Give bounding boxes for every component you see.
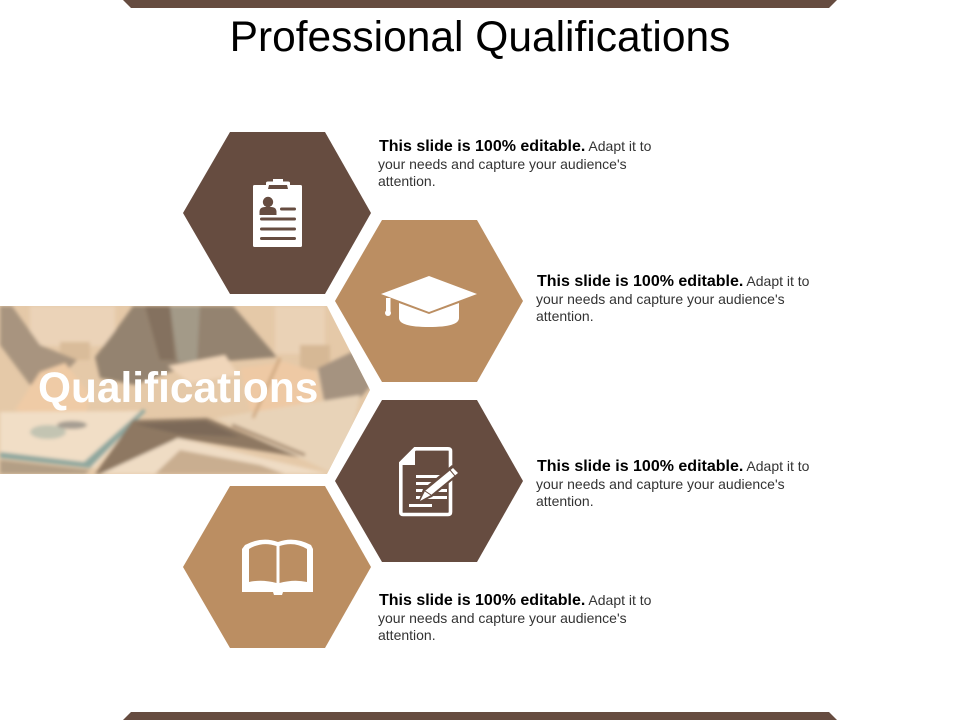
text block 3 bbox=[536, 458, 809, 509]
text block 1: This slide is 100% editable. Adapt it to bbox=[379, 138, 651, 155]
text block 4 bbox=[378, 592, 651, 643]
text block 1: your needs and capture your audience's bbox=[378, 156, 627, 172]
text block 2: your needs and capture your audience's bbox=[536, 290, 785, 306]
icon: open book bbox=[242, 540, 313, 595]
title: Professional Qualifications bbox=[230, 14, 730, 61]
icon: graduation cap bbox=[381, 276, 477, 327]
text block 4: This slide is 100% editable. Adapt it to bbox=[379, 592, 651, 609]
text block 2 bbox=[536, 273, 809, 324]
text block 3: attention. bbox=[536, 493, 594, 509]
hexagon 3: document bbox=[335, 400, 523, 562]
hexagon 2: graduation bbox=[335, 220, 523, 382]
text block 3: your needs and capture your audience's bbox=[536, 476, 785, 492]
text block 2: attention. bbox=[536, 308, 594, 324]
banner label: Qualifications bbox=[38, 364, 318, 411]
icon: document and pen bbox=[400, 448, 460, 514]
hexagon 4: book bbox=[183, 486, 371, 648]
text block 1 bbox=[378, 138, 651, 189]
hexagon 1: profile bbox=[183, 132, 371, 294]
top bar bbox=[123, 0, 837, 8]
icon: clipboard with person bbox=[253, 179, 302, 247]
text block 1: attention. bbox=[378, 173, 436, 189]
text block 4: attention. bbox=[378, 627, 436, 643]
bottom bar bbox=[123, 712, 837, 720]
text block 4: your needs and capture your audience's bbox=[378, 610, 627, 626]
photo banner bbox=[0, 306, 380, 474]
text block 2: This slide is 100% editable. Adapt it to bbox=[537, 273, 809, 290]
text block 3: This slide is 100% editable. Adapt it to bbox=[537, 458, 809, 475]
